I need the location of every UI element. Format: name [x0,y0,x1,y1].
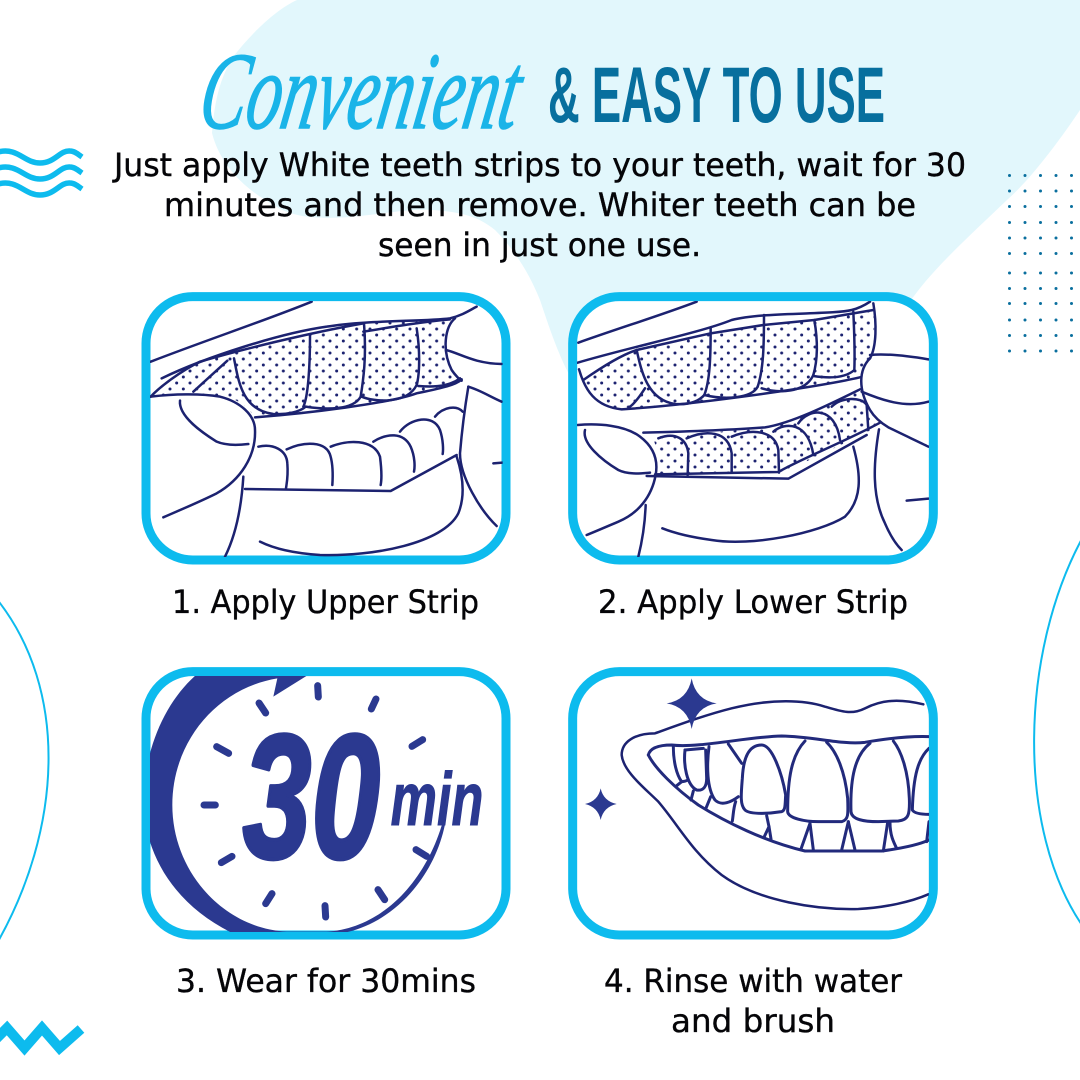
intro text: Just apply White teeth strips to your teeth, wait for 30 [112,146,966,184]
panel: step 3 wear for 30 minutes [143,672,506,937]
intro text [112,146,966,264]
caption: step 3: 3. Wear for 30mins [176,962,476,1000]
lower strip dotted area [652,390,880,474]
caption: step 4 [604,962,903,1040]
icon: large sparkle [667,678,717,729]
lower teeth and lip [225,408,463,557]
finger and thumb outlines [578,354,928,557]
panel: step 1 apply upper strip [146,297,506,560]
lower teeth strip line art [643,389,880,479]
background blob [212,0,1080,385]
decoration: waves [0,151,82,195]
upper teeth and lips line art [151,302,477,417]
timer 30 text: 30 [243,699,380,896]
caption: step 4: 4. Rinse with water [604,962,903,1000]
panel: step 2 apply lower strip [573,297,933,560]
decoration: dot grid [1008,174,1073,352]
finger and thumb outlines [151,318,502,526]
decoration: left arc [0,598,49,945]
upper strip dotted area [583,310,874,409]
intro text: minutes and then remove. Whiter teeth can be [164,186,916,224]
timer crescent arrow [143,672,445,937]
caption: step 2: 2. Apply Lower Strip [598,583,908,621]
teeth [648,736,929,851]
decoration: right arc [1034,535,1080,928]
timer min text: min [391,757,483,841]
intro text: seen in just one use. [378,226,701,264]
timer tick marks [204,686,427,917]
upper teeth and lips line art [578,302,876,409]
title: Convenient [192,30,533,152]
decoration: zigzag [0,1028,81,1048]
caption: step 1: 1. Apply Upper Strip [172,583,479,621]
caption: step 4: and brush [671,1002,835,1040]
mouth outline [622,701,928,909]
icon: small sparkle [585,788,617,820]
upper strip dotted area [162,322,452,414]
panel: step 4 rinse with water [573,672,933,935]
